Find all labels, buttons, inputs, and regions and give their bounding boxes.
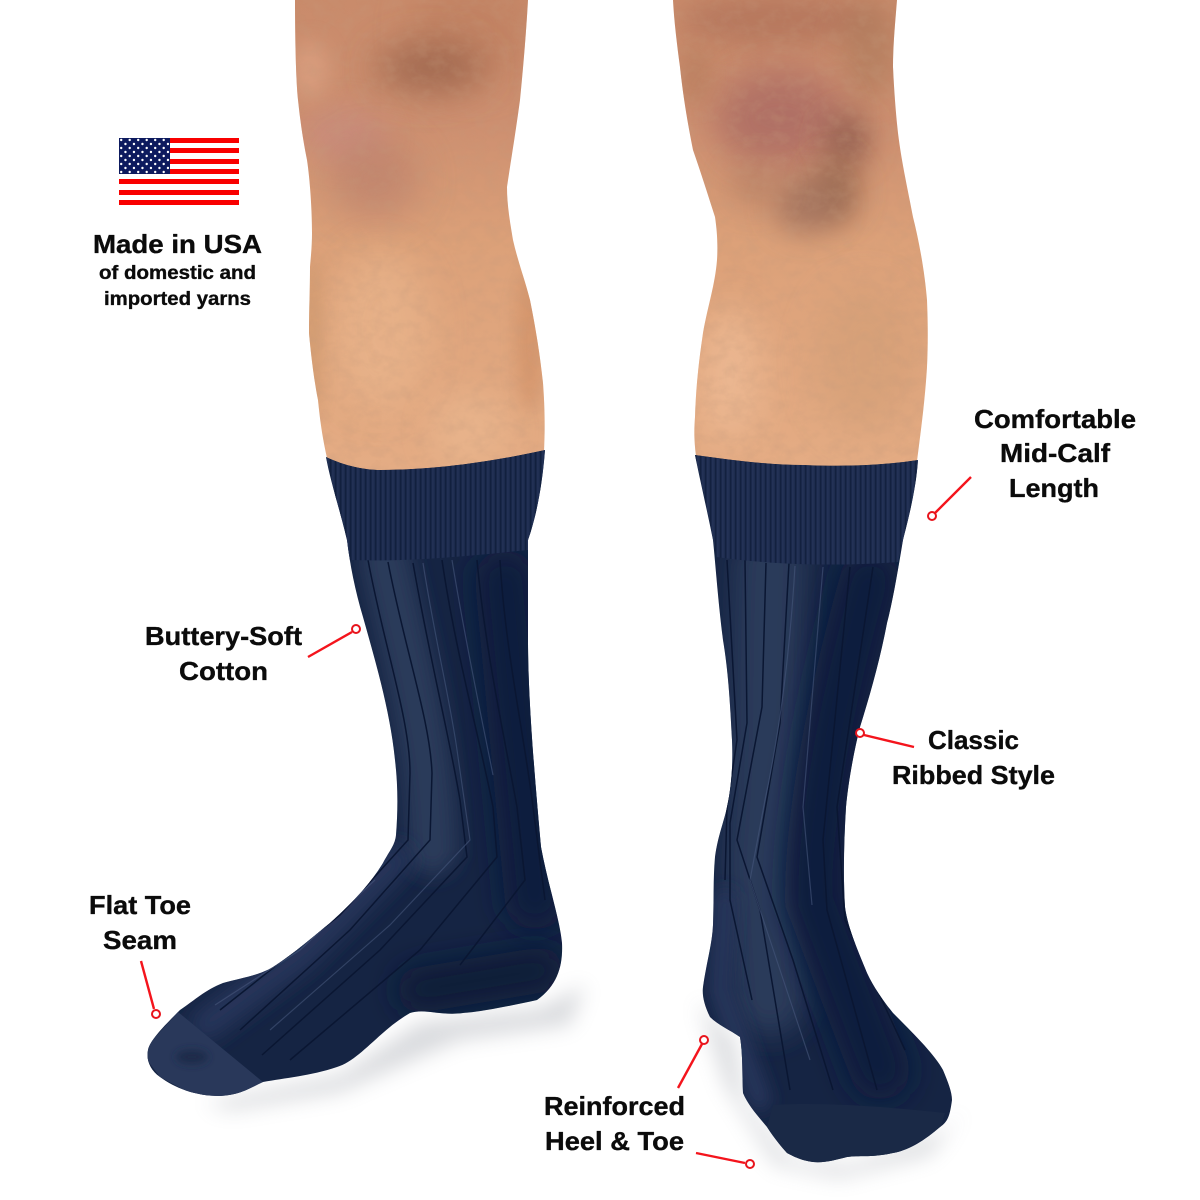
callout: Comfortable Mid-Calf Length: Comfortable [974, 404, 1136, 434]
text: Made in USA: Made in USA [93, 229, 262, 259]
callout: Reinforced Heel & Toe [544, 1036, 754, 1168]
flag: USA [119, 138, 239, 205]
callout: Reinforced Heel & Toe: Reinforced [544, 1091, 685, 1121]
left sock lit band [205, 560, 540, 1025]
right sock [690, 440, 960, 1170]
callout: Comfortable Mid-Calf Length: Length [1009, 473, 1099, 503]
right leg [665, 0, 930, 490]
right sock lit band [720, 565, 880, 1100]
callout: Flat Toe Seam: Flat Toe [89, 890, 191, 920]
callout: Reinforced Heel & Toe: Heel & Toe [545, 1126, 684, 1156]
callout: Classic Ribbed Style [856, 725, 1055, 790]
foot shadows [205, 985, 965, 1178]
callout: Flat Toe Seam [89, 890, 191, 1018]
left sock toe [147, 1012, 263, 1097]
callout: Buttery-Soft Cotton [145, 621, 360, 686]
callout: Flat Toe Seam: Seam [103, 925, 177, 955]
callout: Classic Ribbed Style: Ribbed Style [892, 760, 1055, 790]
callout: Comfortable Mid-Calf Length [928, 404, 1136, 520]
text: Made in USA: of domestic and [99, 263, 256, 284]
callout: Buttery-Soft Cotton: Buttery-Soft [145, 621, 302, 651]
right sock toe [767, 1104, 945, 1165]
left leg [285, 0, 545, 490]
left sock cuff [326, 450, 545, 560]
callout: Classic Ribbed Style: Classic [928, 725, 1019, 755]
right sock cuff [695, 455, 918, 565]
callout: Comfortable Mid-Calf Length: Mid-Calf [1000, 438, 1110, 468]
right sock ribs [725, 560, 905, 1090]
text: Made in USA [93, 229, 262, 310]
left sock [140, 440, 570, 1110]
callout: Buttery-Soft Cotton: Cotton [179, 656, 268, 686]
text: Made in USA: imported yarns [104, 289, 251, 310]
left sock ribs [220, 560, 545, 1060]
